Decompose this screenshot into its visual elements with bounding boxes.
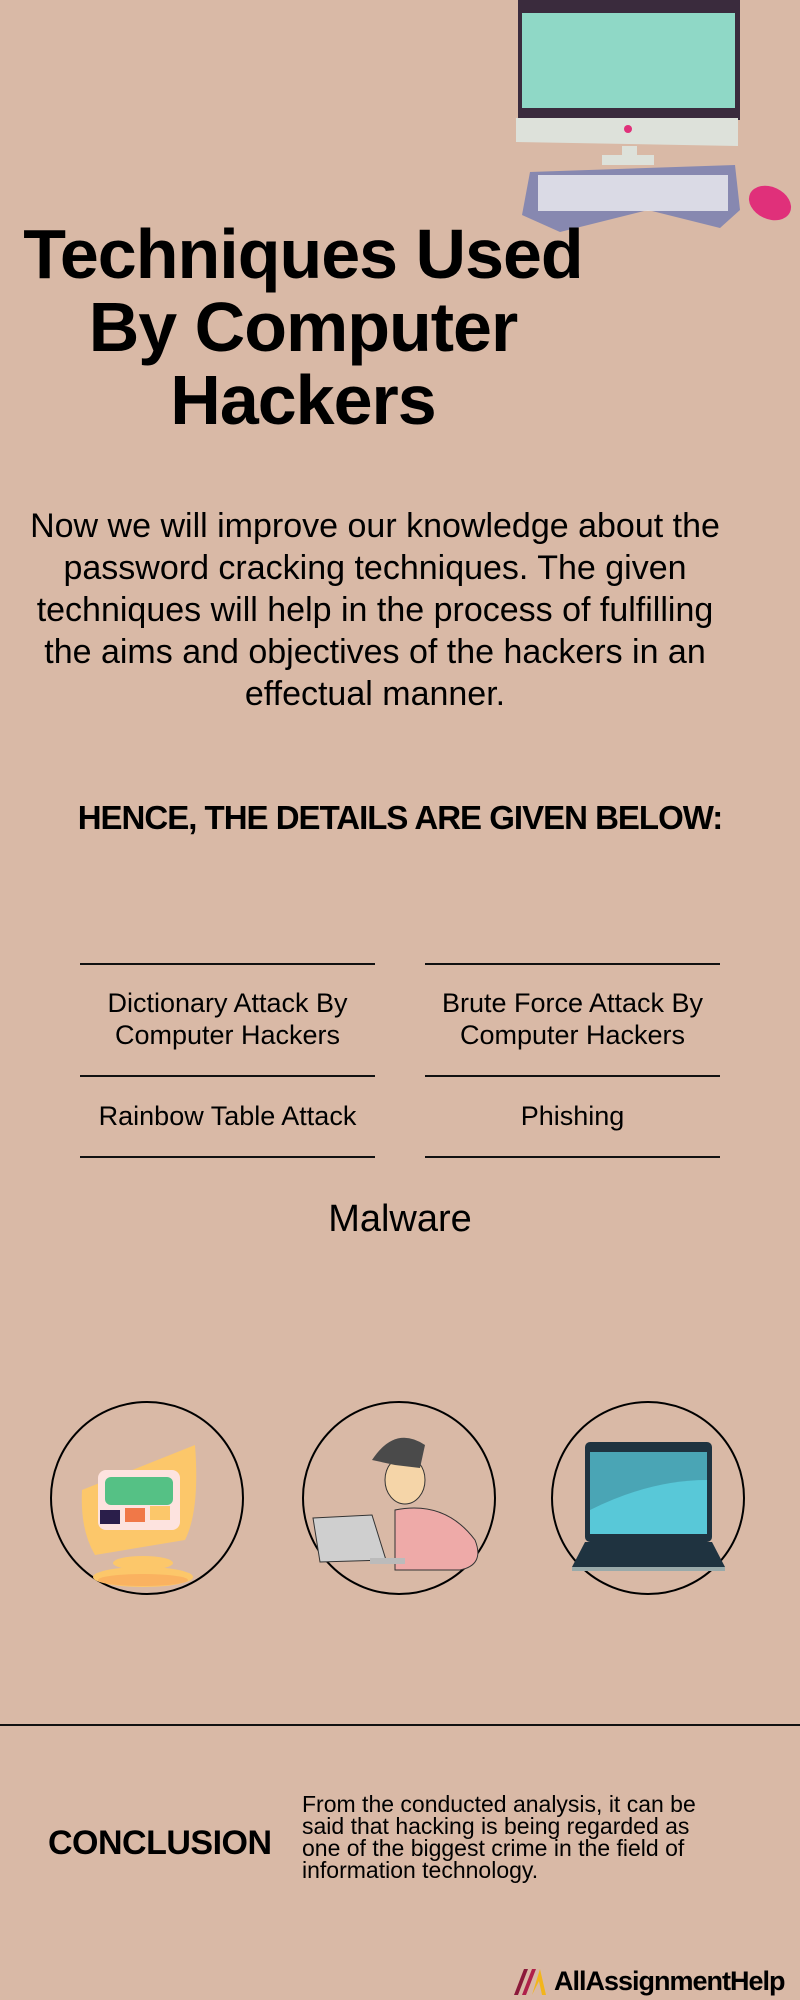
item: dictionary attack [107, 988, 348, 1050]
conclusion text: From the conducted analysis, it can be [302, 1791, 696, 1817]
intro paragraph: effectual manner. [245, 675, 505, 713]
item: phishing: Phishing [521, 1101, 624, 1131]
item: dictionary attack: Dictionary Attack By [107, 988, 348, 1018]
mouse [743, 179, 797, 227]
illustration: desktop computer [516, 0, 792, 232]
item: brute force attack: Computer Hackers [460, 1020, 685, 1050]
intro paragraph [30, 507, 720, 713]
item: dictionary attack: Computer Hackers [115, 1020, 340, 1050]
icon: laptop [552, 1402, 744, 1594]
intro paragraph: techniques will help in the process of fulfilling [37, 591, 713, 629]
item: brute force attack [442, 988, 703, 1050]
conclusion text: said that hacking is being regarded as [302, 1813, 689, 1839]
logo: AllAssignmentHelp [554, 1966, 785, 1996]
item: brute force attack: Brute Force Attack By [442, 988, 703, 1018]
keyboard [522, 165, 740, 232]
intro paragraph: password cracking techniques. The given [63, 549, 687, 587]
conclusion text: one of the biggest crime in the field of [302, 1835, 684, 1861]
intro paragraph: Now we will improve our knowledge about the [30, 507, 720, 545]
intro paragraph: the aims and objectives of the hackers in an [44, 633, 706, 671]
title: Techniques Used [23, 215, 583, 293]
icon circles [50, 1401, 745, 1595]
monitor [516, 0, 740, 165]
conclusion text: information technology. [302, 1857, 538, 1883]
subheading: HENCE, THE DETAILS ARE GIVEN BELOW: [78, 799, 722, 836]
conclusion text [302, 1791, 696, 1883]
conclusion heading: CONCLUSION [48, 1824, 272, 1862]
item: rainbow table attack: Rainbow Table Attack [99, 1101, 356, 1131]
icon: retro computer [51, 1402, 243, 1594]
item: malware: Malware [328, 1198, 472, 1240]
title: By Computer [89, 288, 517, 366]
icon: person with laptop [303, 1402, 495, 1594]
title [23, 215, 583, 439]
title: Hackers [170, 361, 436, 439]
